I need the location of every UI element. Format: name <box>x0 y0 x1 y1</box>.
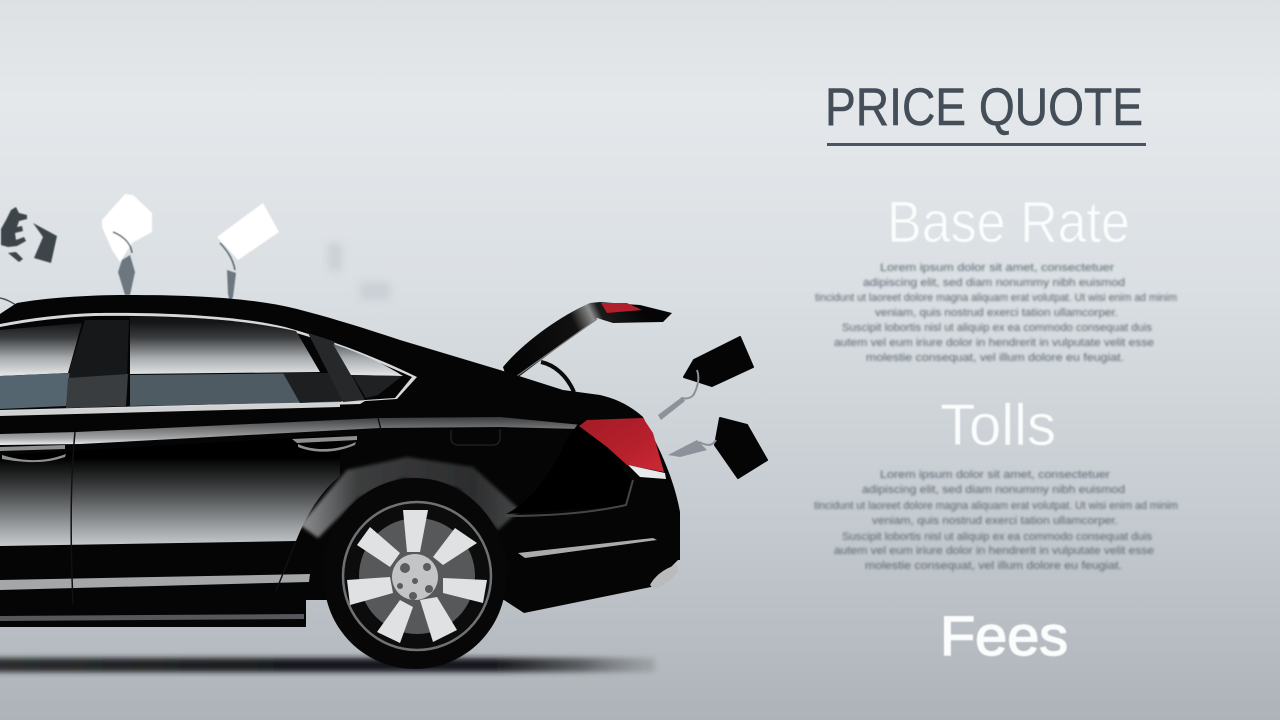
text block: base rate description: tincidunt ut laoreet dolore magna aliquam erat volutpat. Ut wisi enim ad minim <box>815 292 1177 304</box>
icon: faded price tags <box>328 243 390 300</box>
car taillight chrome <box>628 465 666 479</box>
car belt line chrome <box>0 403 340 416</box>
car door pillar <box>66 320 129 408</box>
text block: tolls description: veniam, quis nostrud exerci tation ullamcorper. <box>872 515 1118 527</box>
icon: black price tag lower <box>668 418 767 478</box>
text block: tolls description: adipiscing elit, sed diam nonummy nibh euismod <box>862 484 1125 496</box>
car wheel arch sheen <box>300 457 520 538</box>
icon: black price tag upper <box>658 337 753 420</box>
text block: tolls description <box>814 469 1178 572</box>
car shoulder chrome <box>0 417 582 445</box>
wheel hub <box>392 554 438 600</box>
icon: currency symbol fragment <box>1 207 57 263</box>
text block: tolls description: tincidunt ut laoreet dolore magna aliquam erat volutpat. Ut wisi enim ad minim <box>814 500 1178 512</box>
car exhaust <box>650 565 678 589</box>
car rear panel recess <box>506 420 631 514</box>
text block: base rate description: adipiscing elit, sed diam nonummy nibh euismod <box>863 277 1125 289</box>
icon: string fragment at left edge <box>0 298 16 305</box>
car rear panel line <box>506 480 633 516</box>
illustration: black sedan <box>0 295 680 669</box>
icon: white price tag two <box>217 203 279 302</box>
text block: base rate description: molestie consequat, vel illum dolore eu feugiat. <box>866 352 1124 364</box>
car bumper strip <box>518 538 657 558</box>
text block: base rate description: Lorem ipsum dolor sit amet, consectetuer <box>880 262 1114 274</box>
text block: tolls description: autem vel eum iriure dolor in hendrerit in vulputate velit esse <box>834 545 1154 557</box>
car quarter window <box>333 344 403 398</box>
car door sheen <box>0 435 340 546</box>
car trunk lid <box>503 302 672 392</box>
car door handles <box>0 436 357 462</box>
wheel spokes <box>347 510 487 643</box>
ground shadow <box>0 658 655 672</box>
heading: fees: Fees <box>940 604 1068 667</box>
text block: tolls description: Suscipit lobortis nisl ut aliquip ex ea commodo consequat duis <box>842 531 1153 543</box>
car rear pillar <box>308 333 365 402</box>
text block: base rate description: autem vel eum iriure dolor in hendrerit in vulputate velit esse <box>834 337 1154 349</box>
car fuel door outline <box>451 429 500 445</box>
car rim <box>343 502 491 650</box>
car rear window <box>130 317 362 406</box>
text block: base rate description: Suscipit lobortis nisl ut aliquip ex ea commodo consequat duis <box>842 322 1153 334</box>
heading: base rate: Base Rate <box>887 190 1130 255</box>
car door seams <box>71 418 381 604</box>
car sill chrome <box>0 574 310 590</box>
text block: tolls description: molestie consequat, vel illum dolore eu feugiat. <box>865 560 1122 572</box>
car wheel arch <box>322 478 508 578</box>
car front window <box>0 323 82 409</box>
text block: tolls description: Lorem ipsum dolor sit amet, consectetuer <box>880 469 1110 481</box>
heading: price quote: PRICE QUOTE <box>825 78 1143 137</box>
car chrome window trim <box>0 313 417 414</box>
text block: base rate description <box>815 262 1177 364</box>
car rear tire <box>324 487 506 669</box>
car taillight <box>579 418 664 472</box>
text block: base rate description: veniam, quis nostrud exerci tation ullamcorper. <box>875 307 1118 319</box>
car body silhouette <box>0 295 680 627</box>
car lower sill line <box>0 614 304 621</box>
heading: tolls: Tolls <box>940 393 1056 458</box>
icon: white price tag one <box>102 194 152 295</box>
